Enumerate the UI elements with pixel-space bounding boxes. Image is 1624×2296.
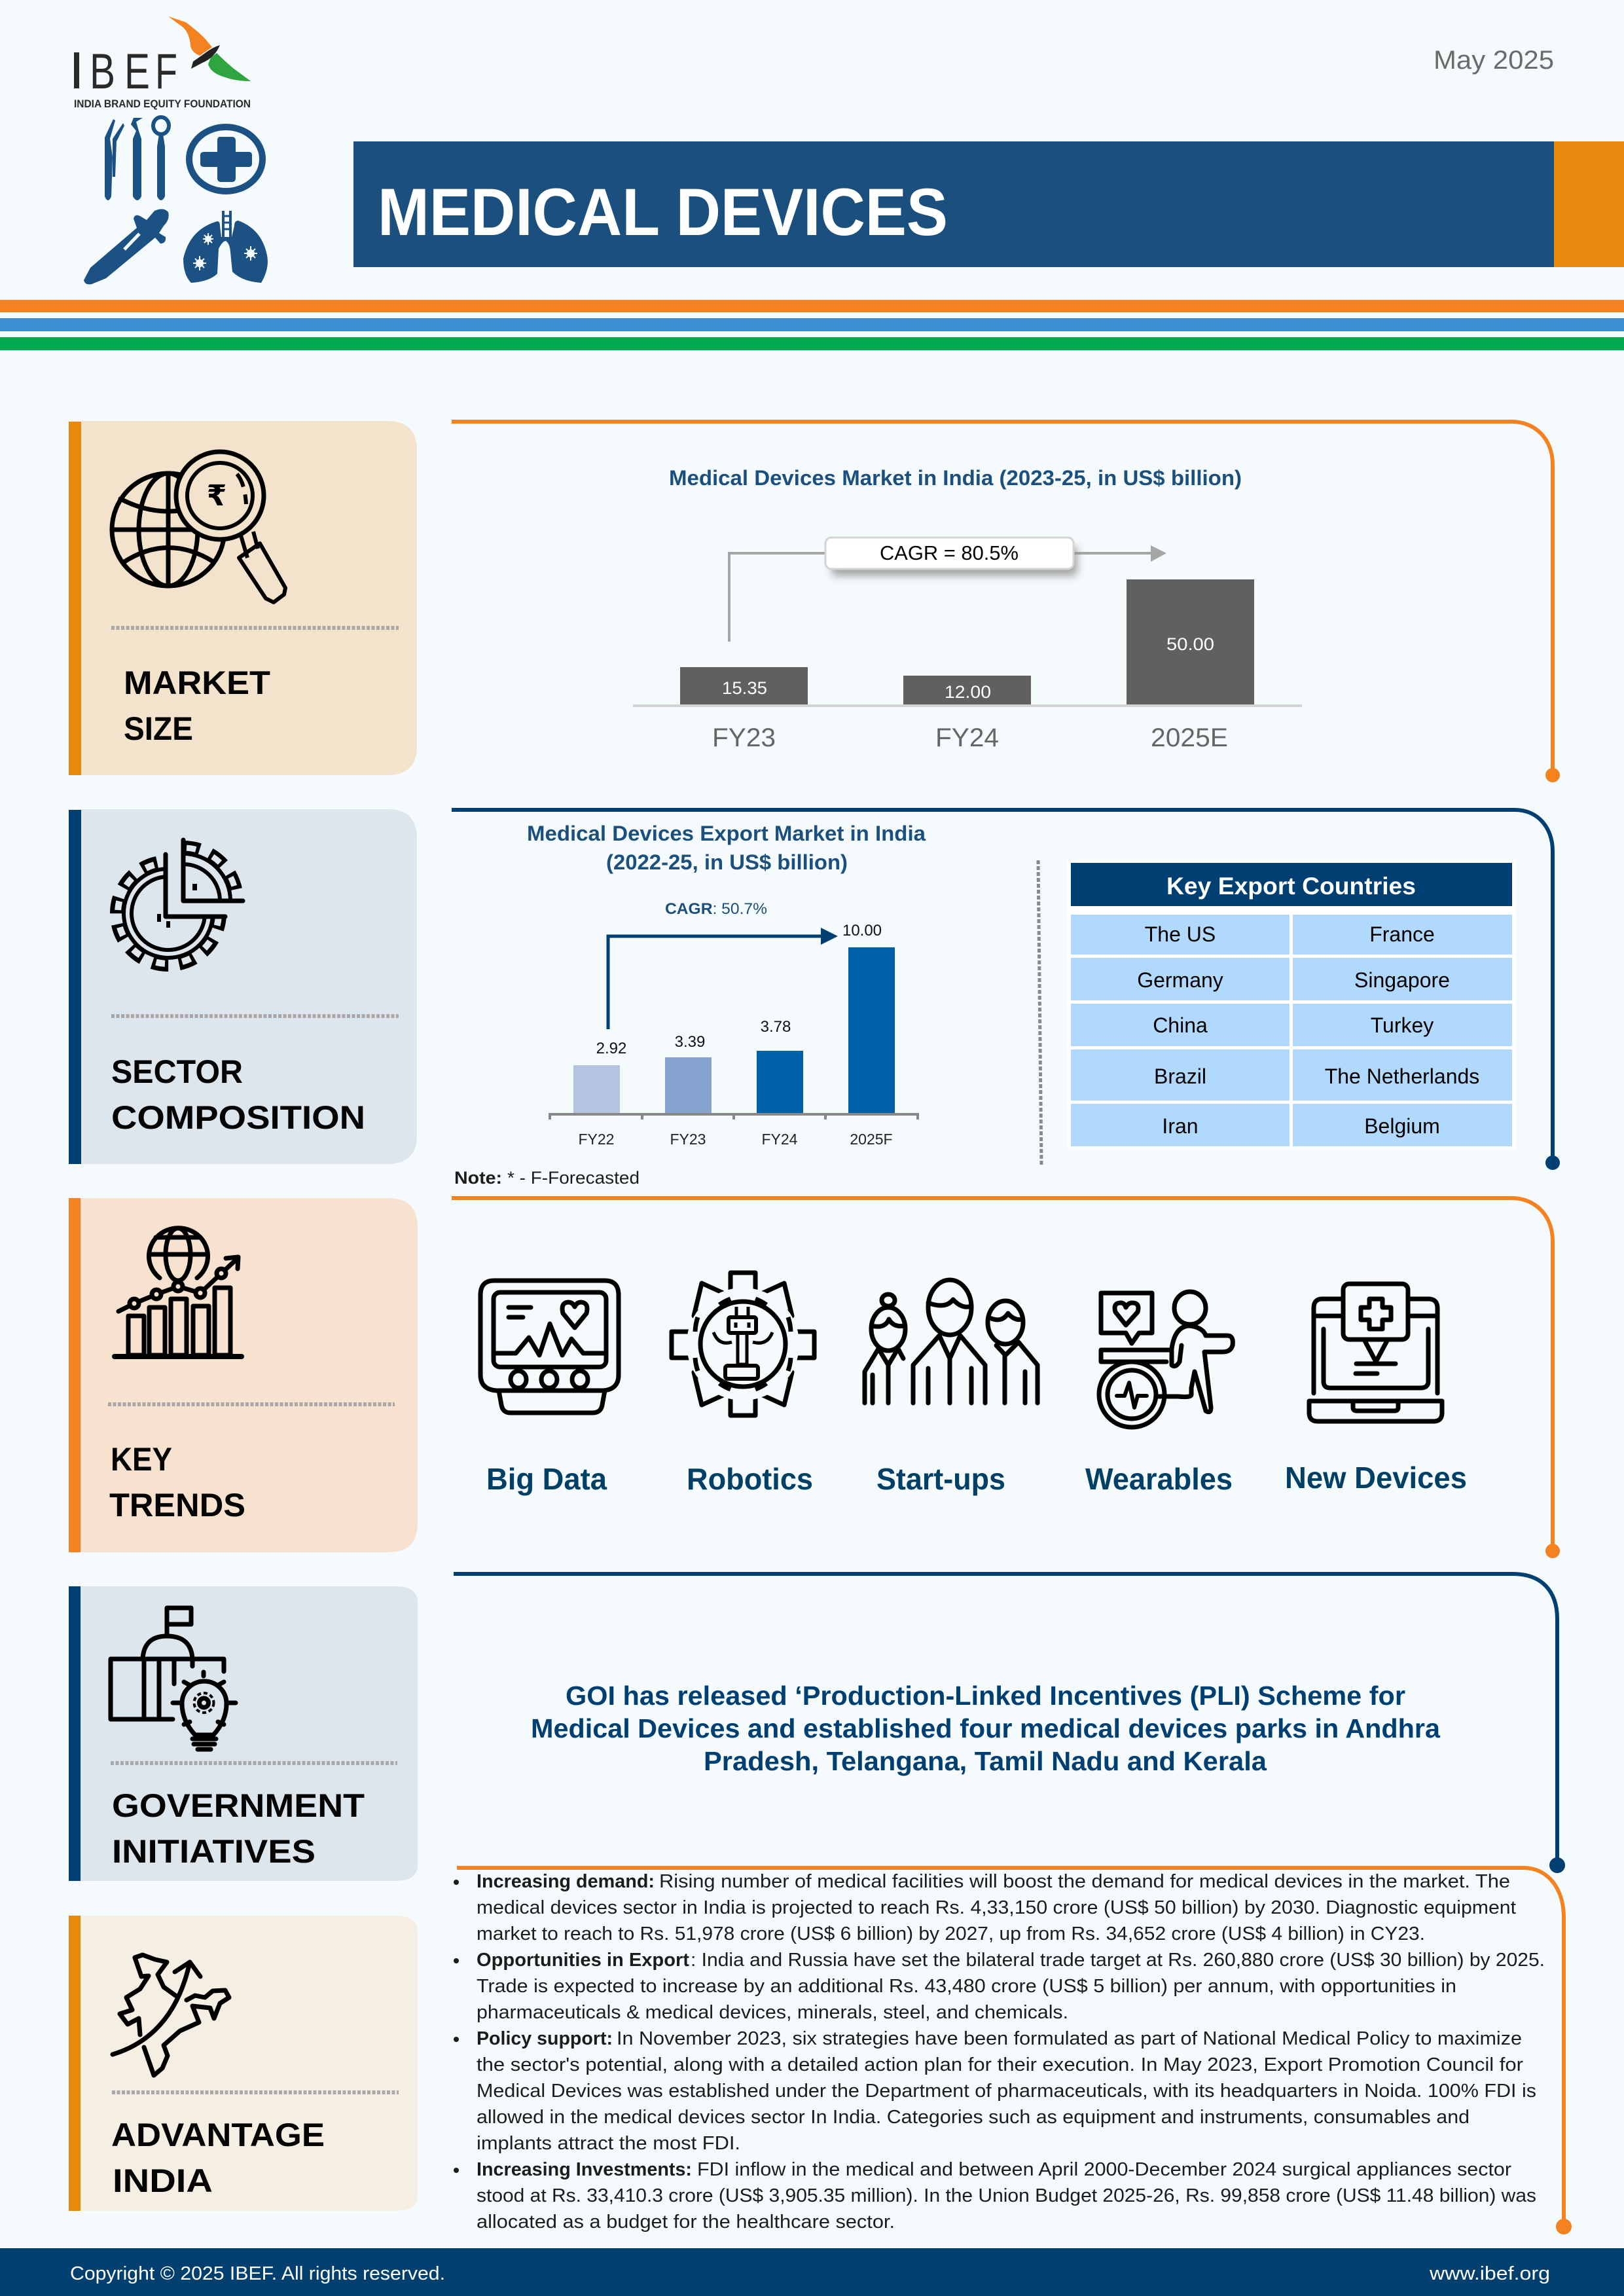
- note: [454, 1168, 640, 1188]
- note: * - F-Forecasted: [507, 1168, 640, 1188]
- bullet: policy support: Medical Devices was established under the Department of pharmaceuticals, with its headquarters in Noida. 100% FDI is: [477, 2081, 1536, 2102]
- axis: [633, 704, 1302, 707]
- banner accent: [1554, 141, 1624, 267]
- icon: globe with growth chart: [115, 1228, 242, 1357]
- table cells: [1071, 915, 1512, 1146]
- logo wordmark: F: [155, 44, 177, 100]
- card accent bar: [69, 1586, 81, 1881]
- section label: COMPOSITION: [111, 1099, 365, 1136]
- bullet: increasing investments: stood at Rs. 33,410.3 crore (US$ 3,905.35 million). In the Union Budget 2025-26, Rs. 99,858 crore (US$ 11.48 billion) was: [477, 2185, 1536, 2206]
- bullet: policy support: allowed in the medical devices sector In India. Categories such as equipment and instruments, consumables and: [477, 2107, 1470, 2128]
- chart: export market: [454, 822, 926, 1188]
- bars: [680, 579, 1254, 705]
- section label: ADVANTAGE: [111, 2117, 325, 2153]
- frame: market size: [452, 422, 1558, 780]
- logo: IBEF: [74, 16, 251, 110]
- frame: advantage india: [457, 1868, 1570, 2232]
- card accent bar: [69, 1198, 81, 1552]
- axis labels: FY24: [935, 723, 999, 752]
- card background: [81, 421, 417, 775]
- tricolour stripes: [0, 300, 1624, 350]
- frame: sector composition: [452, 810, 1558, 1168]
- card accent bar: [69, 810, 81, 1164]
- section label: [111, 1053, 365, 1136]
- header medical icons: [84, 117, 268, 284]
- icon: india map with arrow: [113, 1955, 229, 2075]
- chart title: Medical Devices Export Market in India: [527, 822, 926, 845]
- text block: advantage india bullets: [454, 1871, 1545, 2232]
- vertical dotted divider: [1038, 860, 1041, 1165]
- CAGR callout: CAGR = 80.5%: [880, 541, 1019, 564]
- table text: China: [1153, 1013, 1208, 1037]
- note: Note:: [454, 1168, 502, 1188]
- panel: advantage india: [69, 1916, 418, 2211]
- CAGR arrow: [608, 928, 838, 1029]
- panel: key trends: [69, 1198, 418, 1552]
- bullet: opportunities in export: [454, 1950, 1545, 2023]
- logo wordmark: [74, 44, 177, 100]
- bullet: increasing demand: Rising number of medical facilities will boost the demand for medical devices in the market. The: [659, 1871, 1510, 1892]
- title banner: [353, 141, 1624, 267]
- frame: key trends: [452, 1198, 1558, 1556]
- table text: Germany: [1137, 968, 1223, 992]
- axis labels: 2025F: [850, 1131, 893, 1148]
- section label: KEY: [111, 1441, 172, 1478]
- icon: runner with heart monitor: [1099, 1292, 1233, 1427]
- label: Start-ups: [876, 1462, 1005, 1496]
- trend: start-ups: [865, 1280, 1038, 1496]
- bullet: increasing demand: [454, 1871, 1516, 1944]
- callout: PLI scheme: GOI has released ‘Production-Linked Incentives (PLI) Scheme for: [566, 1681, 1405, 1711]
- date: May 2025: [1434, 46, 1554, 75]
- bullet: increasing demand: Increasing demand:: [477, 1871, 655, 1892]
- bullet: policy support: implants attract the most FDI.: [477, 2133, 740, 2154]
- logo wing: green: [208, 53, 251, 81]
- bullet: opportunities in export: Trade is expected to increase by an additional Rs. 43,480 crore (US$ 5 billion) per annum, with opportunities in: [477, 1976, 1456, 1997]
- icon: lungs: [183, 211, 268, 283]
- bullet: opportunities in export: Opportunities in Export: [477, 1950, 690, 1971]
- icon: three people: [865, 1280, 1038, 1403]
- section label: INDIA: [113, 2162, 213, 2199]
- table text: The Netherlands: [1325, 1065, 1479, 1088]
- axis labels: [579, 1131, 893, 1148]
- axis labels: FY23: [670, 1131, 706, 1148]
- callout: PLI scheme: Pradesh, Telangana, Tamil Nadu and Kerala: [704, 1746, 1267, 1776]
- bar values: [722, 634, 1214, 702]
- icon: dropper: [84, 209, 169, 284]
- title: MEDICAL DEVICES: [378, 175, 948, 249]
- panel: sector composition: [69, 809, 417, 1164]
- bullet: policy support: the sector's potential, along with a detailed action plan for their execution. In May 2023, Export Promotion Council for: [477, 2054, 1524, 2075]
- trend: new devices: [1285, 1284, 1467, 1495]
- footer bar: [0, 2248, 1624, 2296]
- section label: [112, 1787, 365, 1870]
- section label: INITIATIVES: [112, 1833, 316, 1870]
- section label: GOVERNMENT: [112, 1787, 365, 1824]
- table header: Key Export Countries: [1166, 873, 1416, 900]
- icon: dental mirror: [157, 134, 165, 200]
- bullet: increasing investments: Increasing Investments:: [477, 2159, 692, 2180]
- table text: Singapore: [1354, 968, 1450, 992]
- divider: [108, 1402, 395, 1406]
- logo tagline: INDIA BRAND EQUITY FOUNDATION: [74, 98, 251, 110]
- label: New Devices: [1285, 1461, 1467, 1495]
- icon: health monitor: [480, 1281, 619, 1413]
- icon: medical cross: [189, 127, 262, 191]
- bullet: increasing investments: [454, 2159, 1536, 2232]
- divider: [111, 626, 399, 630]
- icon: government building with idea bulb: [111, 1608, 236, 1749]
- chart title: Medical Devices Market in India (2023-25, in US$ billion): [669, 466, 1242, 490]
- icon: tweezers: [105, 119, 124, 200]
- section label: SIZE: [124, 710, 193, 747]
- section label: [124, 665, 270, 747]
- bullet: policy support: In November 2023, six strategies have been formulated as part of National Medical Policy to maximize: [617, 2028, 1522, 2049]
- icon: dental probe: [131, 118, 143, 200]
- frame: government initiatives: [454, 1574, 1563, 1871]
- section label: SECTOR: [111, 1053, 243, 1090]
- table text: Brazil: [1154, 1065, 1206, 1088]
- table text: Belgium: [1364, 1114, 1440, 1138]
- bar values: 50.00: [1166, 634, 1214, 654]
- divider: [111, 1014, 399, 1018]
- icon: laptop with medical cross: [1309, 1284, 1442, 1421]
- label: Wearables: [1085, 1462, 1233, 1496]
- section label: [111, 2117, 325, 2199]
- bullet: policy support: Policy support:: [477, 2028, 613, 2049]
- label: Robotics: [687, 1462, 813, 1496]
- axis labels: FY22: [579, 1131, 614, 1148]
- bar values: 12.00: [945, 682, 991, 702]
- trend: wearables: [1085, 1292, 1233, 1496]
- bullet: increasing demand: medical devices sector in India is projected to reach Rs. 4,33,150 crore (US$ 50 billion) by 2030. Diagnostic equipment: [477, 1897, 1516, 1918]
- table text: The US: [1145, 922, 1216, 946]
- bullet: increasing demand: market to reach to Rs. 51,978 crore (US$ 6 billion) by 2027, up from Rs. 34,652 crore (US$ 4 billion) in CY23.: [477, 1923, 1425, 1944]
- banner background: [353, 141, 1554, 267]
- axis: [550, 1114, 918, 1120]
- bullet: opportunities in export: : India and Russia have set the bilateral trade target at Rs. 260,880 crore (US$ 30 billion) by 2025.: [691, 1950, 1545, 1971]
- website: www.ibef.org: [1429, 2263, 1550, 2284]
- card background: [81, 1586, 418, 1881]
- card background: [81, 1198, 418, 1552]
- callout: PLI scheme: [531, 1681, 1441, 1776]
- chart: market size: [633, 466, 1302, 752]
- icon: robot gear: [672, 1273, 814, 1415]
- bar values: 3.39: [675, 1033, 705, 1051]
- icon: gear pie: [117, 840, 243, 964]
- card background: [81, 1916, 418, 2211]
- table text: [1137, 922, 1479, 1138]
- trend: robotics: [672, 1273, 814, 1496]
- logo wordmark: B: [90, 44, 115, 100]
- callout: PLI scheme: Medical Devices and established four medical devices parks in Andhra: [531, 1713, 1441, 1743]
- panel: government initiatives: [69, 1586, 418, 1881]
- icon: globe with magnifier: ₹: [207, 479, 226, 513]
- section label: [109, 1441, 245, 1523]
- table text: Iran: [1162, 1114, 1199, 1138]
- chart title: [527, 822, 926, 874]
- bar values: 15.35: [722, 678, 767, 698]
- icon: globe with magnifier: [112, 452, 285, 602]
- bar values: [596, 922, 882, 1057]
- table header: [1071, 863, 1512, 906]
- card background: [81, 809, 417, 1164]
- label: Big Data: [486, 1462, 607, 1496]
- section label: TRENDS: [109, 1487, 245, 1523]
- bar values: 10.00: [842, 922, 882, 939]
- card accent bar: [69, 1916, 81, 2211]
- logo wing: orange: [168, 16, 212, 56]
- footer: [0, 2248, 1624, 2296]
- logo wordmark: E: [124, 44, 150, 100]
- divider: [112, 2090, 399, 2094]
- bar values: 2.92: [596, 1040, 626, 1057]
- table: key export countries: [1067, 860, 1516, 1149]
- bars: [573, 947, 895, 1113]
- card accent bar: [69, 422, 81, 775]
- bullet: opportunities in export: pharmaceuticals & medical devices, minerals, steel, and chemicals.: [477, 2002, 1068, 2023]
- CAGR arrow: [729, 545, 1166, 642]
- copyright: Copyright © 2025 IBEF. All rights reserved.: [70, 2263, 445, 2284]
- divider: [111, 1761, 397, 1765]
- table text: France: [1369, 922, 1435, 946]
- CAGR label: CAGR: 50.7%: [665, 900, 767, 918]
- trend: big data: [480, 1281, 619, 1496]
- chart title: (2022-25, in US$ billion): [606, 850, 848, 874]
- bullet: policy support: [454, 2028, 1536, 2154]
- section label: MARKET: [124, 665, 270, 701]
- axis labels: FY24: [762, 1131, 798, 1148]
- panel: market size: [69, 421, 417, 775]
- logo bird: [191, 45, 220, 69]
- table text: Turkey: [1371, 1013, 1434, 1037]
- CAGR callout: [825, 538, 1077, 576]
- bar values: 3.78: [761, 1018, 791, 1036]
- axis labels: 2025E: [1151, 723, 1228, 752]
- axis labels: [712, 723, 1228, 752]
- axis labels: FY23: [712, 723, 776, 752]
- bullet: increasing investments: FDI inflow in the medical and between April 2000-December 2024 surgical appliances sector: [697, 2159, 1512, 2180]
- bullet: increasing investments: allocated as a budget for the healthcare sector.: [477, 2212, 895, 2232]
